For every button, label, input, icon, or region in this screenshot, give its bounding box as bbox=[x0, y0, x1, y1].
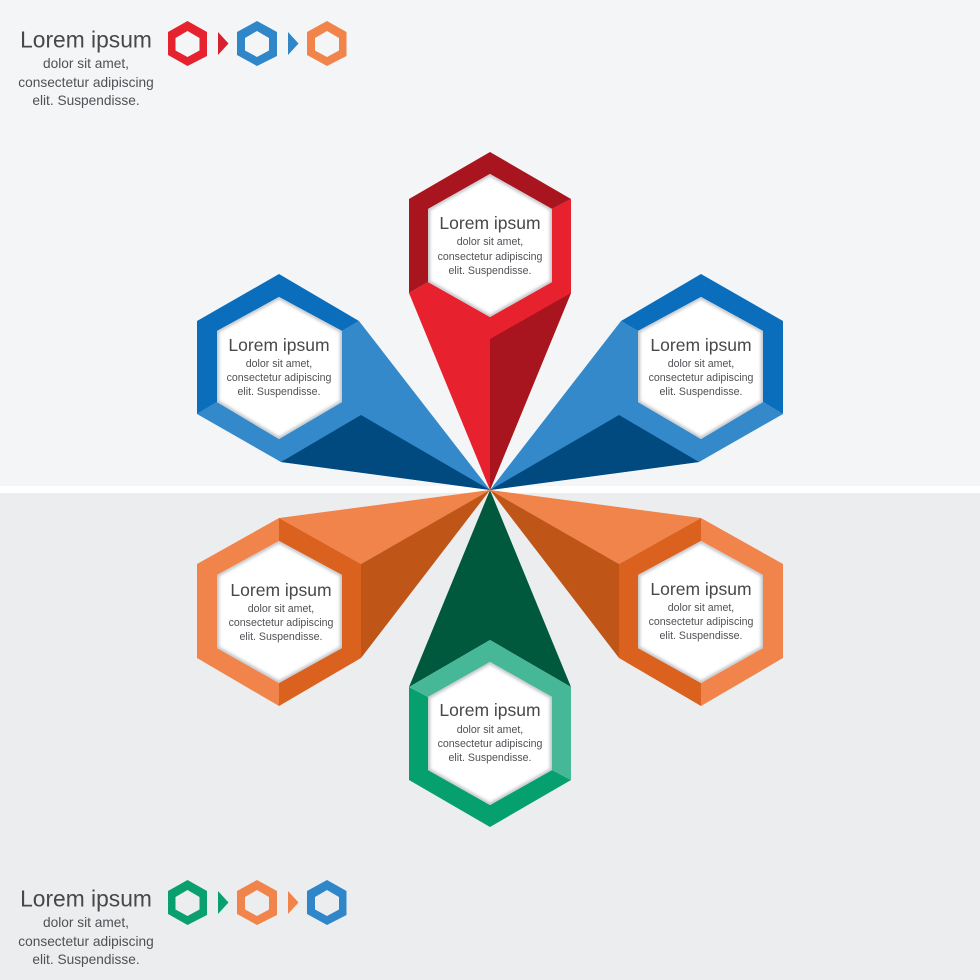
text: red hexagon bbox=[438, 213, 543, 277]
text: upper-right blue hexagon: elit. Suspendisse. bbox=[659, 386, 743, 398]
text: green hexagon: elit. Suspendisse. bbox=[448, 752, 532, 764]
text: green hexagon bbox=[438, 700, 543, 764]
text: red hexagon: dolor sit amet, bbox=[457, 236, 523, 248]
legend description: top: consectetur adipiscing bbox=[18, 75, 154, 90]
text: red hexagon: consectetur adipiscing bbox=[438, 251, 543, 263]
text: green hexagon: Lorem ipsum bbox=[439, 700, 541, 720]
text: lower-right orange hexagon: dolor sit amet, bbox=[668, 602, 734, 614]
text: upper-left blue hexagon: elit. Suspendisse. bbox=[237, 386, 321, 398]
icon: blue hexagon bbox=[307, 880, 346, 925]
icon: green hexagon bbox=[168, 880, 207, 925]
legend heading: top: Lorem ipsum bbox=[20, 26, 152, 52]
icon: red hexagon bbox=[168, 21, 207, 66]
text: lower-right orange hexagon: Lorem ipsum bbox=[650, 579, 752, 599]
panel: upper-right blue hexagon pointer bbox=[490, 274, 783, 490]
text: lower-left orange hexagon: Lorem ipsum bbox=[230, 580, 332, 600]
text: red hexagon: elit. Suspendisse. bbox=[448, 265, 532, 277]
legend description: bottom: elit. Suspendisse. bbox=[32, 952, 140, 967]
legend description: top: elit. Suspendisse. bbox=[32, 93, 140, 108]
text: upper-right blue hexagon: consectetur adipiscing bbox=[649, 372, 754, 384]
arrow: orange bbox=[288, 891, 298, 914]
arrow: blue bbox=[288, 32, 298, 55]
text: upper-left blue hexagon: Lorem ipsum bbox=[228, 335, 330, 355]
text: upper-right blue hexagon: Lorem ipsum bbox=[650, 335, 752, 355]
text: lower-left orange hexagon: consectetur adipiscing bbox=[229, 617, 334, 629]
arrow: red bbox=[218, 32, 228, 55]
panel: green hexagon pointer bbox=[409, 490, 571, 827]
text: lower-left orange hexagon bbox=[229, 580, 334, 643]
text: green hexagon: dolor sit amet, bbox=[457, 724, 523, 736]
legend heading: bottom: Lorem ipsum bbox=[20, 886, 152, 912]
legend: bottom bbox=[18, 880, 346, 967]
arrow: green bbox=[218, 891, 228, 914]
icon: blue hexagon bbox=[237, 21, 277, 66]
background: upper panel bbox=[0, 0, 980, 486]
text: upper-left blue hexagon: consectetur adipiscing bbox=[227, 372, 332, 384]
text: upper-left blue hexagon bbox=[227, 335, 332, 398]
background: lower panel bbox=[0, 493, 980, 980]
panel: upper-left blue hexagon pointer bbox=[197, 274, 490, 490]
legend description: top bbox=[18, 56, 154, 108]
text: green hexagon: consectetur adipiscing bbox=[438, 738, 543, 750]
text: upper-right blue hexagon: dolor sit amet, bbox=[668, 358, 734, 370]
panel: lower-left orange hexagon pointer bbox=[197, 490, 490, 706]
text: lower-left orange hexagon: elit. Suspendisse. bbox=[239, 631, 323, 643]
icon: orange hexagon bbox=[237, 880, 277, 925]
icon: orange hexagon bbox=[307, 21, 346, 66]
panel: red hexagon pointer bbox=[409, 152, 571, 490]
legend description: bottom: dolor sit amet, bbox=[43, 915, 129, 930]
text: lower-left orange hexagon: dolor sit amet, bbox=[248, 603, 314, 615]
text: upper-left blue hexagon: dolor sit amet, bbox=[246, 358, 312, 370]
text: lower-right orange hexagon: elit. Suspendisse. bbox=[659, 630, 743, 642]
text: red hexagon: Lorem ipsum bbox=[439, 213, 541, 233]
legend: top bbox=[18, 21, 346, 108]
panel: lower-right orange hexagon pointer bbox=[490, 490, 783, 706]
text: upper-right blue hexagon bbox=[649, 335, 754, 398]
text: lower-right orange hexagon bbox=[649, 579, 754, 642]
legend description: bottom: consectetur adipiscing bbox=[18, 934, 154, 949]
legend description: top: dolor sit amet, bbox=[43, 56, 129, 71]
text: lower-right orange hexagon: consectetur adipiscing bbox=[649, 616, 754, 628]
legend description: bottom bbox=[18, 915, 154, 967]
